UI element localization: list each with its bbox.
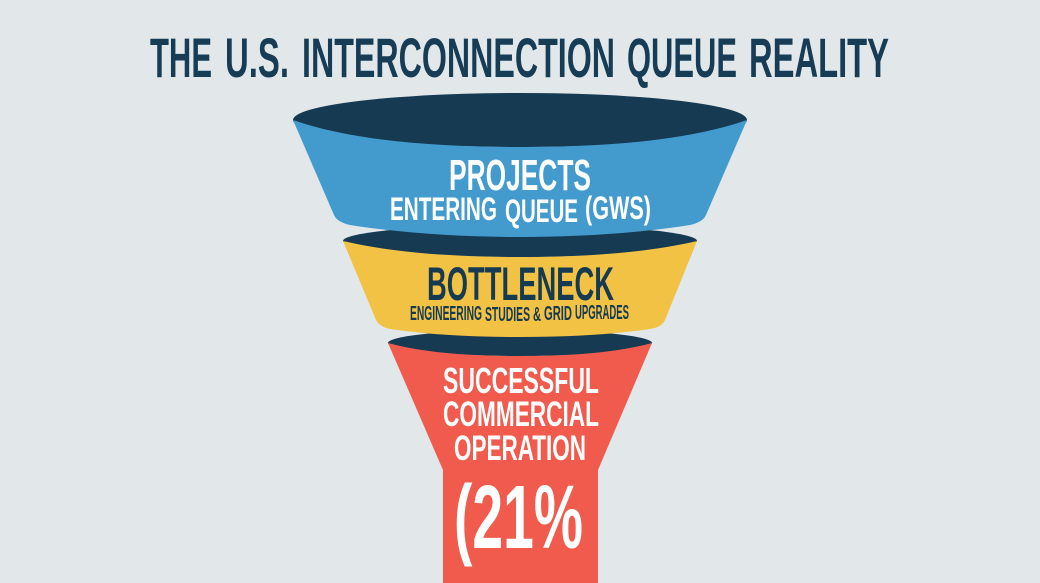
label: engineering studies: STUDIES: [485, 304, 530, 326]
label: engineering studies: &: [533, 304, 541, 326]
label: engineering studies: GRID: [544, 303, 572, 325]
label: entering queue: ENTERING: [390, 191, 497, 227]
blue band: [293, 120, 747, 237]
label: bottleneck: BOTTLENECK: [427, 257, 614, 310]
figure: 21 percent: (21%: [454, 468, 583, 568]
panel: queue stage opening: [343, 225, 697, 257]
label: engineering studies: ENGINEERING: [410, 303, 482, 325]
funnel stem: [388, 343, 652, 583]
label: successful: SUCCESSFUL: [443, 360, 599, 401]
title: REALITY: [749, 26, 889, 89]
label: commercial: COMMERCIAL: [443, 395, 599, 434]
panel: bottleneck stage: [343, 241, 697, 337]
label: operation: OPERATION: [454, 429, 586, 468]
title: QUEUE: [627, 26, 737, 89]
label: entering queue: QUEUE: [505, 193, 578, 229]
label: engineering studies: [410, 302, 629, 326]
label: projects: PROJECTS: [449, 151, 591, 200]
title: THE: [150, 26, 212, 89]
label: entering queue: (GWS): [585, 190, 651, 226]
panel: projects stage: [293, 120, 747, 237]
title: U.S.: [225, 26, 289, 89]
label: entering queue: [390, 190, 651, 229]
yellow band: [343, 241, 697, 337]
title: INTERCONNECTION: [302, 26, 615, 89]
funnel: [293, 93, 747, 583]
panel: successful operation stage: [388, 343, 652, 583]
panel: bottleneck stage: UPGRADES: [575, 302, 629, 324]
panel: bottleneck stage opening: [388, 330, 652, 356]
panel: funnel top opening: [293, 93, 747, 147]
